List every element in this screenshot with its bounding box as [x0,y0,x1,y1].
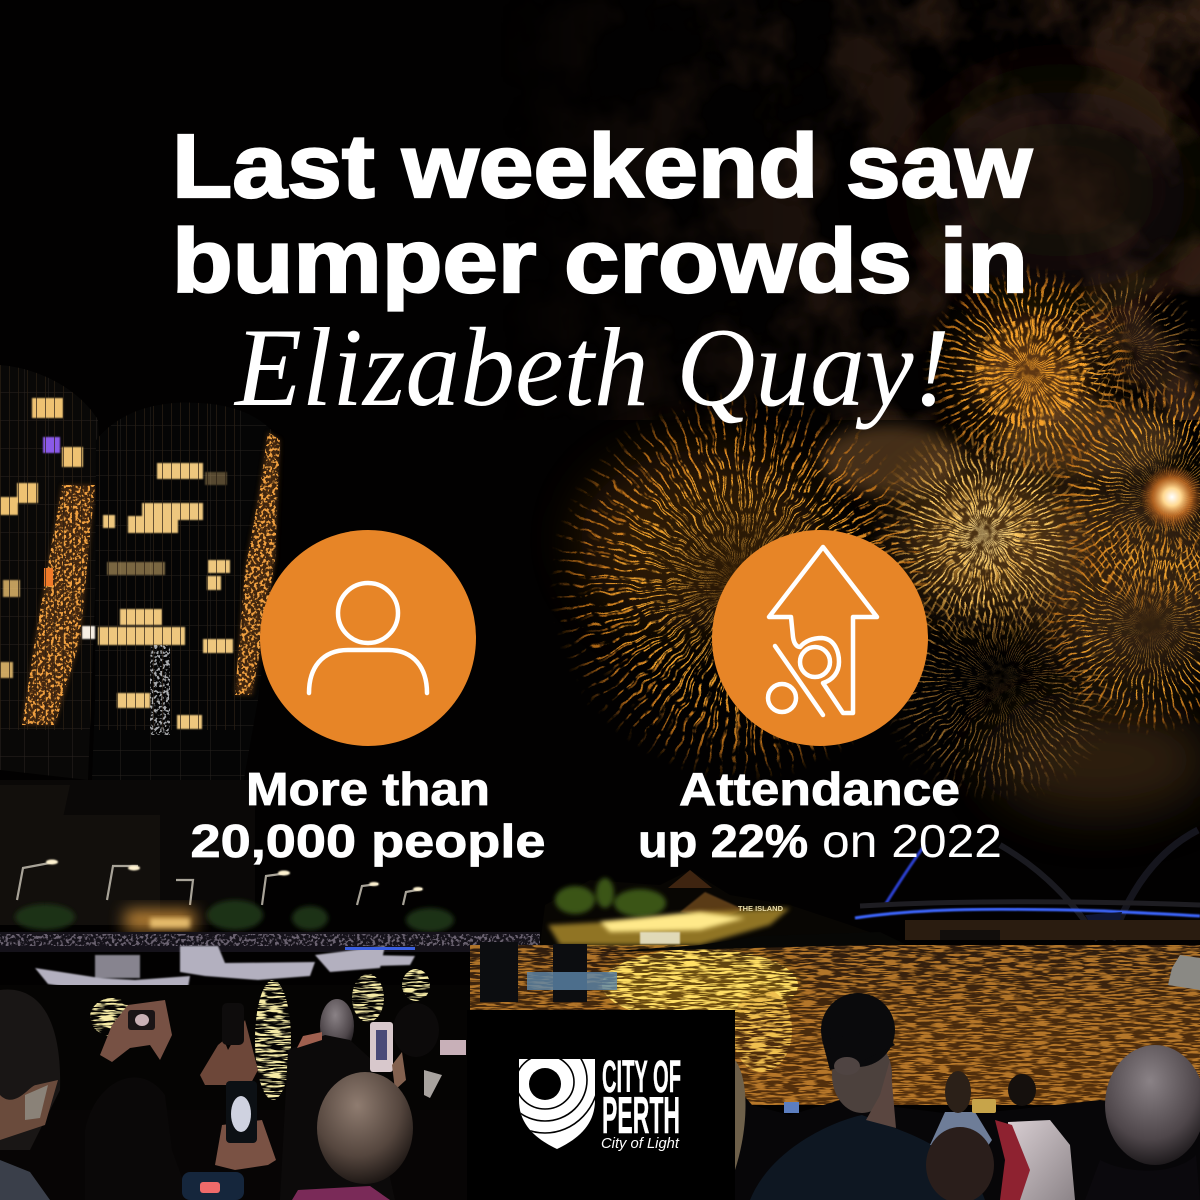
stat label: 20,000 people [190,815,546,867]
icon: City of Perth shield [519,1059,595,1149]
burst: right [1087,307,1200,680]
crowd, right [735,993,1200,1200]
stat label: on 2022 [822,815,1002,867]
moored boat and speaker stacks [480,942,1200,1002]
island with lights: THE ISLAND [738,904,784,913]
icon: percent arrow [768,547,877,715]
logo panel: CITY OF [602,1051,681,1102]
burst: top orange [976,318,1084,426]
burst: large golden, centre [647,487,843,683]
title line 1: Last weekend saw [172,117,1033,217]
burst: pale middle [927,477,1043,593]
stat label: Attendance [679,763,960,815]
title [172,117,1033,312]
logo wordmark: City of Light [601,1135,680,1152]
white-hot core [1140,465,1200,529]
left tower [0,365,100,780]
stat label [638,763,1002,867]
smoke in the sky, top right [500,0,1200,815]
stat label: More than [246,763,490,815]
right tower [0,365,282,780]
logo panel [470,1010,735,1151]
icon: person [309,583,427,693]
stat: attendance [638,530,1002,867]
orange circle [712,530,928,746]
river water [0,945,1200,1110]
podium and street lights [0,780,454,932]
logo panel: PERTH [602,1087,680,1145]
title line 2: bumper crowds in [172,212,1028,312]
bridge [855,830,1200,940]
script headline: Elizabeth Quay! [233,306,950,430]
burst: lower dim [938,618,1062,742]
island with lights [540,870,905,952]
stat label: up 22% [638,815,808,867]
stat label [190,763,546,867]
orange circle [260,530,476,746]
logo wordmark [601,1051,681,1152]
fireworks [647,307,1200,742]
stat: people [190,530,546,867]
crowd, left [0,990,470,1200]
distant crowd and boats [0,932,540,992]
